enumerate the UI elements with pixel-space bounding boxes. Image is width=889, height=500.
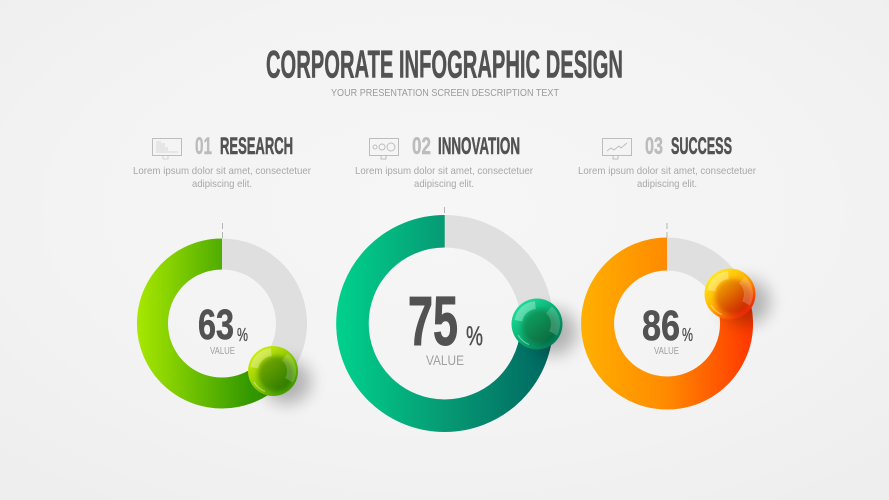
description: Lorem ipsum dolor sit amet, consectetuer — [133, 165, 311, 177]
percent sign: % — [682, 325, 693, 345]
donut chart 75 percent — [352, 231, 537, 416]
value label: VALUE — [654, 346, 679, 357]
panel: innovation — [352, 133, 577, 416]
value label: VALUE — [426, 352, 464, 368]
percent sign: % — [237, 325, 248, 345]
heading number 03: 03 — [645, 133, 663, 160]
panel: success — [578, 133, 770, 393]
glossy ball: teal — [512, 298, 577, 355]
value 63: 63 — [198, 301, 234, 349]
icon: monitor with circles — [370, 138, 398, 159]
glossy ball: green — [248, 346, 311, 404]
value 75: 75 — [408, 282, 458, 360]
donut chart 63 percent — [152, 254, 292, 393]
icon: monitor with text lines — [152, 138, 182, 159]
tick mark — [666, 223, 668, 238]
glossy ball: orange — [704, 268, 770, 325]
heading success: SUCCESS — [671, 133, 732, 160]
heading number 01: 01 — [195, 133, 212, 160]
heading research: RESEARCH — [220, 133, 293, 160]
heading number 02: 02 — [412, 133, 431, 160]
description: adipiscing elit. — [637, 178, 697, 190]
donut chart 86 percent — [598, 254, 737, 393]
description: adipiscing elit. — [414, 178, 474, 190]
description: Lorem ipsum dolor sit amet, consectetuer — [578, 165, 756, 177]
subtitle: YOUR PRESENTATION SCREEN DESCRIPTION TEXT — [331, 88, 559, 99]
description: Lorem ipsum dolor sit amet, consectetuer — [355, 165, 533, 177]
percent sign: % — [466, 321, 483, 351]
tick mark — [444, 207, 446, 213]
tick mark — [222, 223, 224, 238]
value label: VALUE — [210, 346, 235, 357]
icon: monitor with line chart — [602, 138, 632, 159]
panel: research — [133, 133, 311, 404]
heading innovation: INNOVATION — [438, 133, 520, 160]
value 86: 86 — [642, 302, 680, 350]
description: adipiscing elit. — [192, 178, 252, 190]
